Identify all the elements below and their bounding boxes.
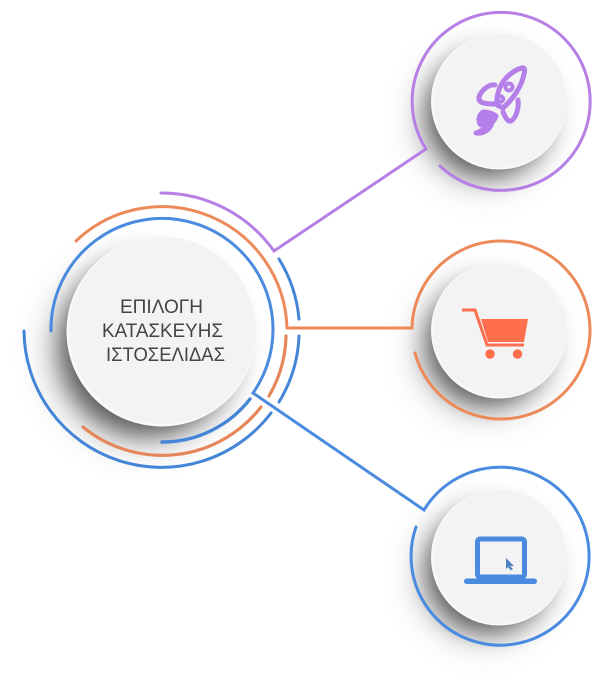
disc: laptop	[431, 490, 567, 626]
central title: ΕΠΙΛΟΓΗ	[120, 296, 203, 318]
central title: ΙΣΤΟΣΕΛΙΔΑΣ	[106, 344, 225, 366]
connector: orange arc, line and ring	[76, 207, 590, 419]
icon: laptop	[464, 539, 537, 584]
connector: purple arc, line and ring	[161, 12, 590, 251]
icon: rocket	[476, 68, 525, 133]
disc: rocket	[431, 34, 567, 170]
disc: cart	[431, 262, 567, 398]
decorative orange arc segments	[83, 336, 286, 455]
decorative blue arc segments	[24, 259, 299, 467]
connector: blue arc, line and ring	[51, 218, 589, 645]
icon: shopping cart	[462, 310, 528, 359]
central title: ΚΑΤΑΣΚΕΥΗΣ	[102, 320, 223, 342]
central title	[102, 296, 225, 366]
central disc	[66, 236, 256, 426]
shadows under the discs	[50, 54, 549, 640]
